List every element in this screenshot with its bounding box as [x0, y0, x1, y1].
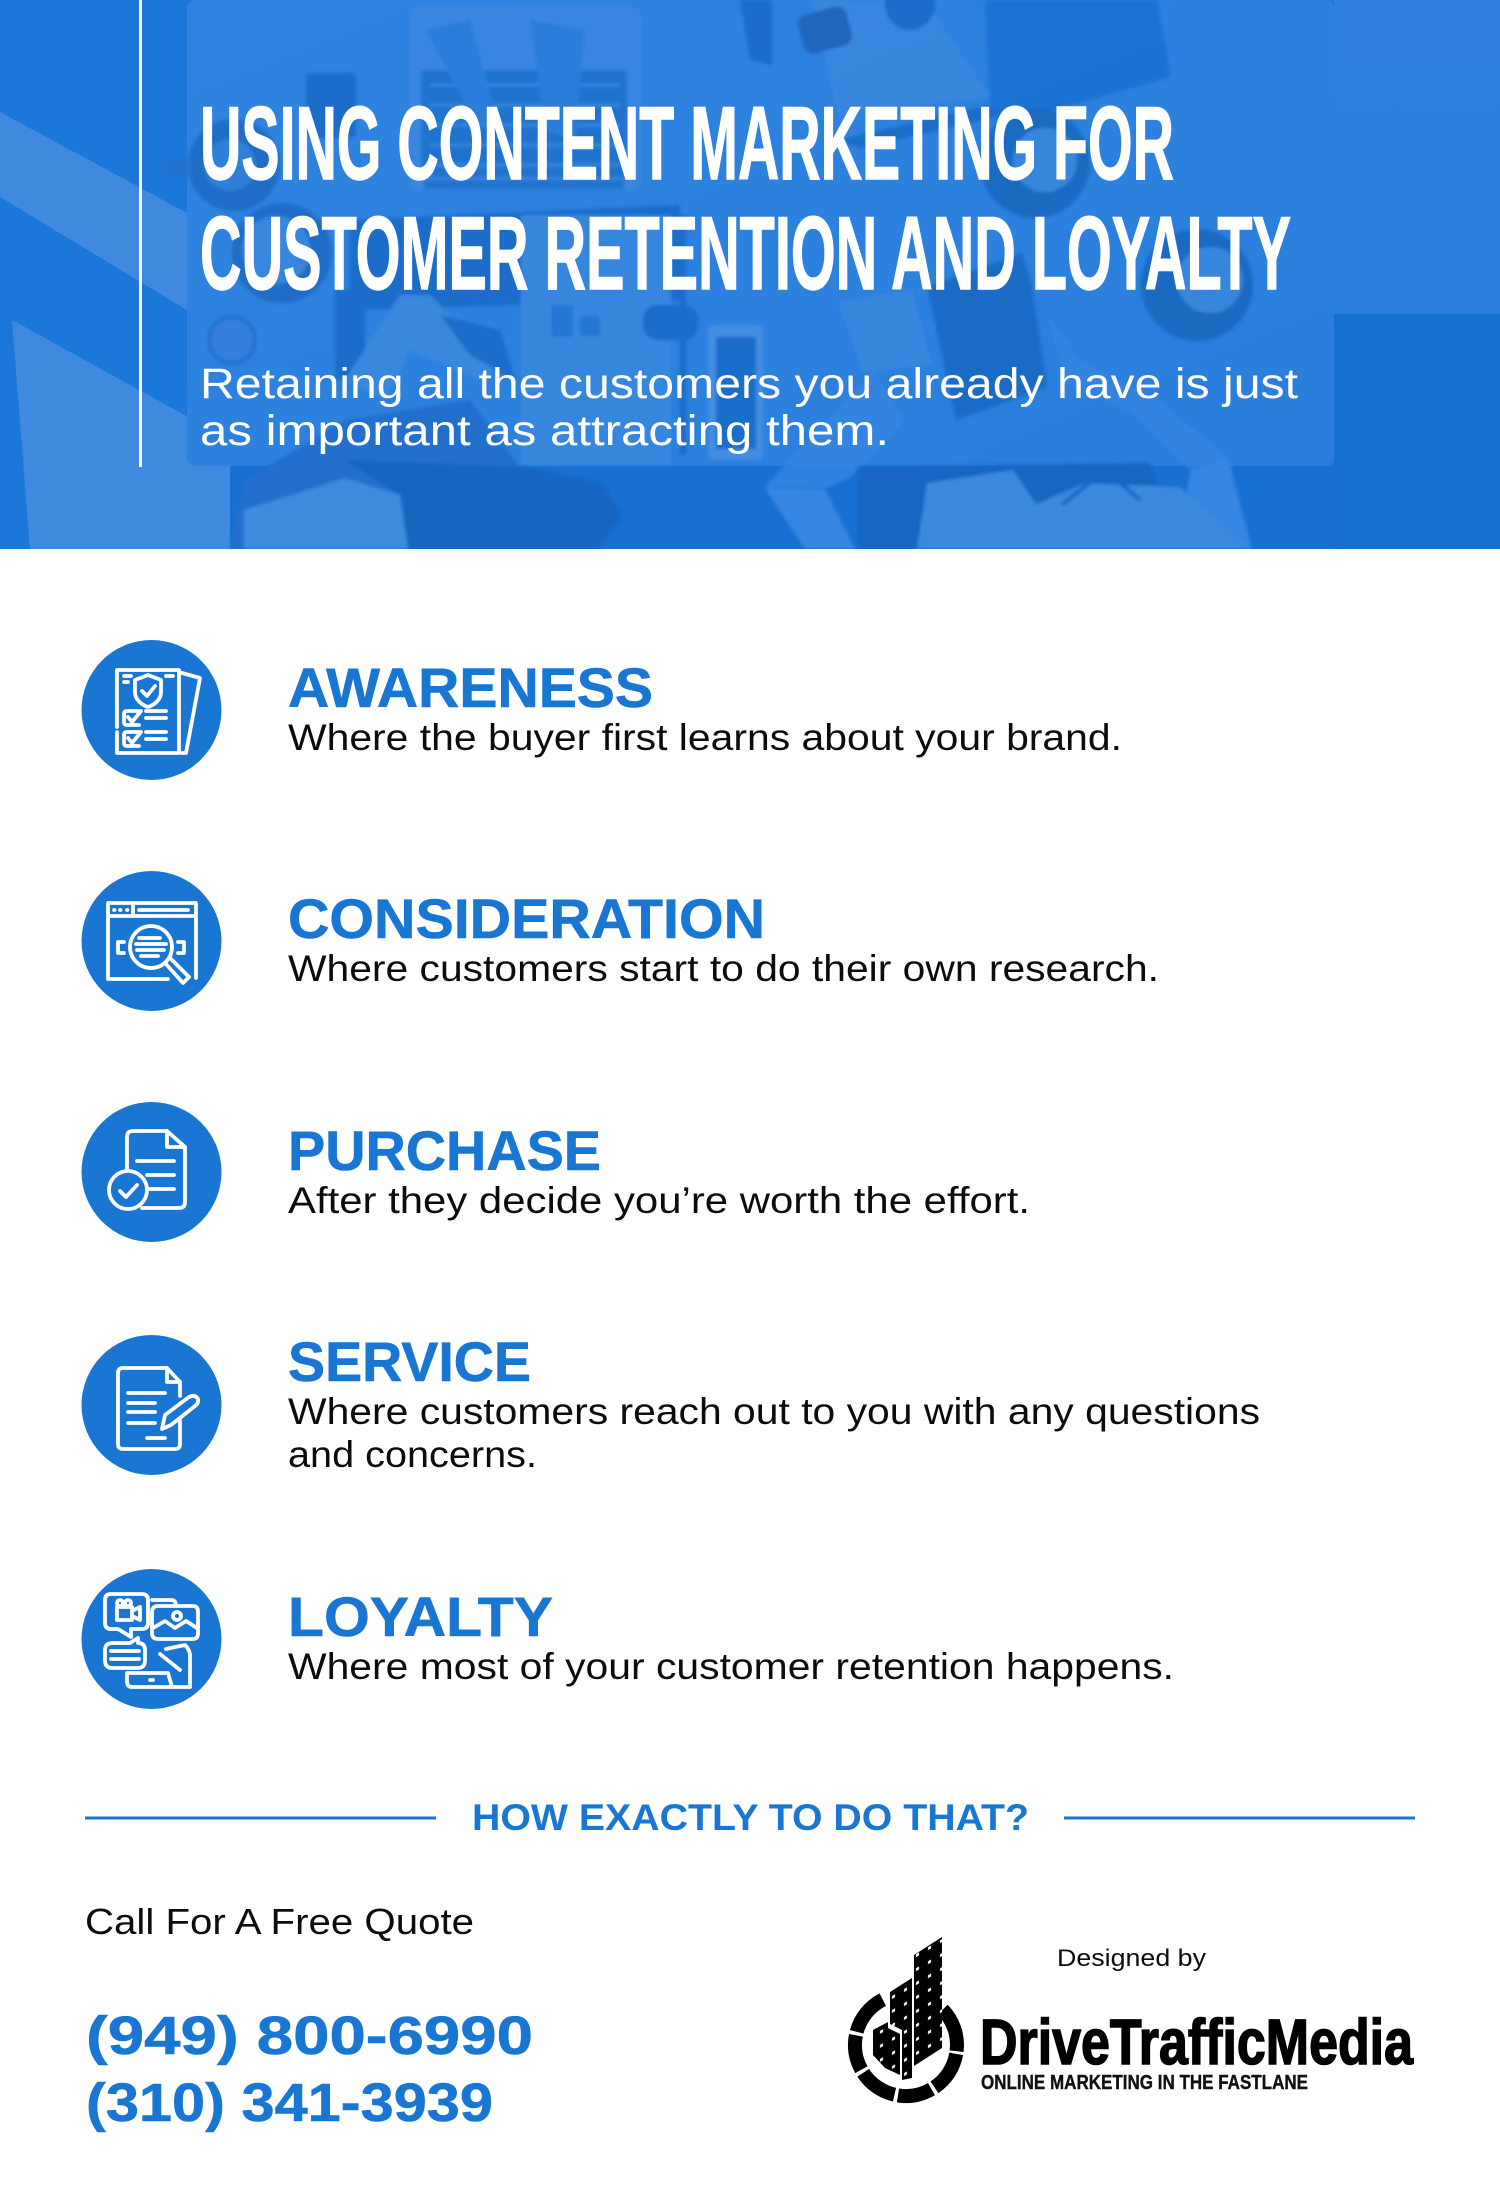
- heading: PURCHASE: [288, 1119, 601, 1182]
- icon: browser with magnifier: [82, 871, 222, 1011]
- icon: document with check: [82, 1102, 222, 1242]
- heading: SERVICE: [288, 1330, 531, 1393]
- heading: AWARENESS: [288, 656, 653, 719]
- heading: LOYALTY: [288, 1585, 553, 1648]
- step: consideration: [82, 871, 1159, 1011]
- phone numbers: (310) 341-3939: [86, 2073, 493, 2133]
- call prompt: Call For A Free Quote: [85, 1901, 474, 1942]
- cups left: [188, 119, 280, 211]
- right objects: [812, 0, 990, 115]
- subtitle: as important as attracting them.: [200, 407, 889, 455]
- description: [288, 1391, 1260, 1475]
- section divider heading: [85, 1797, 1415, 1838]
- header banner: [0, 0, 1500, 549]
- phone: [306, 73, 356, 138]
- icon: checklist with shield: [82, 640, 222, 780]
- hands: [335, 290, 365, 380]
- header background photo: [0, 0, 1500, 549]
- step: purchase: [82, 1102, 1030, 1242]
- icon: content channels: [82, 1569, 222, 1709]
- description: After they decide you’re worth the effort.: [288, 1180, 1030, 1221]
- logo: Drive Traffic Media: [855, 1937, 1413, 2096]
- description: Where the buyer first learns about your brand.: [288, 717, 1122, 758]
- phone numbers: [86, 2006, 533, 2133]
- logo tagline: ONLINE MARKETING IN THE FASTLANE: [981, 2071, 1308, 2094]
- header vertical rule: [139, 0, 142, 467]
- step: service: [82, 1330, 1260, 1475]
- logo wordmark: DriveTrafficMedia: [980, 2006, 1413, 2078]
- section divider heading: HOW EXACTLY TO DO THAT?: [472, 1797, 1029, 1838]
- subtitle: Retaining all the customers you already have is just: [200, 360, 1298, 408]
- description: Where most of your customer retention happens.: [288, 1646, 1174, 1687]
- person right: [1180, 457, 1252, 549]
- chart paper: [350, 205, 680, 310]
- title: [200, 86, 1291, 312]
- description: Where customers start to do their own research.: [288, 948, 1159, 989]
- step: awareness: [82, 640, 1122, 780]
- description: Where customers reach out to you with any questions: [288, 1391, 1260, 1432]
- heading: CONSIDERATION: [288, 887, 765, 950]
- icon: document with pen: [82, 1335, 222, 1475]
- logo mark: skyline in ring: [855, 1937, 957, 2096]
- phone numbers: (949) 800-6990: [86, 2006, 533, 2066]
- step: loyalty: [82, 1569, 1174, 1709]
- person left: [230, 400, 520, 549]
- designer credit: Designed by: [1057, 1945, 1207, 1972]
- description: and concerns.: [288, 1434, 537, 1475]
- laptop: [409, 7, 641, 190]
- subtitle: [200, 360, 1298, 455]
